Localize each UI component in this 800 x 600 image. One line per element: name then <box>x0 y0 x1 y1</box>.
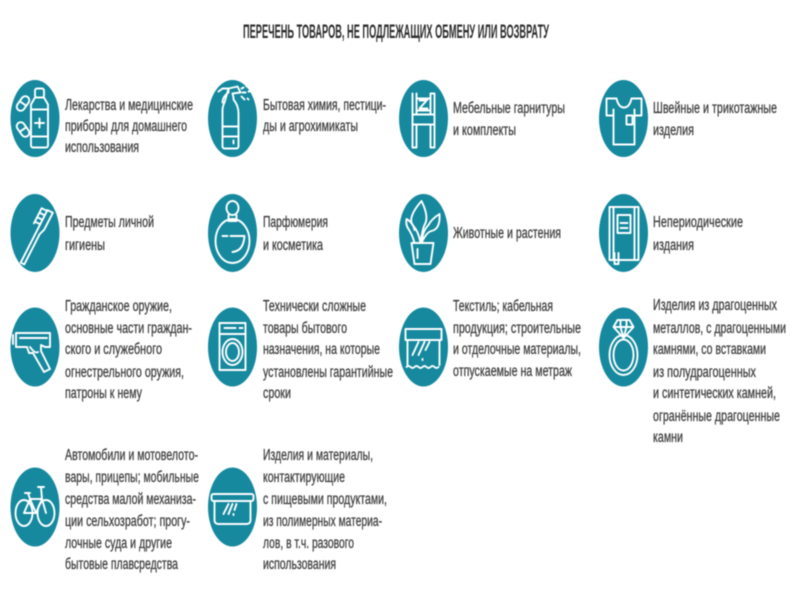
text: textile: и отделочные материалы, <box>453 341 581 358</box>
text: jewellery: из полудрагоценных <box>653 364 756 381</box>
icon: medicine bottle and pills <box>10 80 60 157</box>
text: furniture: Мебельные гарнитуры <box>453 100 565 117</box>
icon: fabric roll <box>399 308 448 386</box>
text: vehicles: вары, прицепы; мобильные <box>65 469 199 486</box>
text: vehicles: лочные суда и другие <box>65 535 172 552</box>
icon: pistol <box>10 308 60 386</box>
item: jewellery <box>599 297 786 446</box>
text: jewellery <box>653 297 786 446</box>
text: textile <box>453 298 581 380</box>
text: complex household goods <box>263 298 393 402</box>
item: non-periodical publications <box>599 194 743 272</box>
text: textile: Текстиль; кабельная <box>453 298 553 315</box>
icon: chair <box>399 80 448 157</box>
text: garments <box>653 100 777 139</box>
text: food contact materials <box>263 447 387 573</box>
text: food contact materials: контактирующие <box>263 469 345 486</box>
text: food contact materials: лов, в т.ч. разового <box>263 535 354 552</box>
text: hygiene <box>65 214 154 254</box>
text: complex household goods: назначения, на которые <box>263 341 380 358</box>
text: household chemicals: Бытовая химия, пестици- <box>263 97 386 114</box>
text: medicines: Лекарства и медицинские <box>65 97 193 114</box>
item: civilian weapons <box>10 298 192 402</box>
text: complex household goods: сроки <box>263 385 291 402</box>
text: furniture: и комплекты <box>453 122 516 139</box>
text: household chemicals <box>263 97 386 135</box>
text: medicines <box>65 97 193 156</box>
text: food contact materials: использования <box>263 556 336 573</box>
text: food contact materials: с пищевыми продуктами, <box>263 491 387 508</box>
text: complex household goods: установлены гарантийные <box>263 364 393 381</box>
text: furniture <box>453 100 565 139</box>
icon: potted plant <box>399 194 448 272</box>
text: food contact materials: Изделия и материалы, <box>263 447 373 464</box>
item: perfume <box>208 194 328 272</box>
icon: spray bottle <box>208 80 257 157</box>
text: complex household goods: товары бытового <box>263 320 347 337</box>
item: vehicles <box>10 447 199 573</box>
text: household chemicals: ды и агрохимикаты <box>263 118 358 135</box>
text: civilian weapons: ского и служебного <box>65 341 162 358</box>
icon: t-shirt <box>599 80 648 157</box>
text: jewellery: камни <box>653 429 683 446</box>
text: perfume: Парфюмерия <box>263 214 328 231</box>
text: complex household goods: Технически сложные <box>263 298 366 315</box>
text: hygiene: Предметы личной <box>65 214 154 231</box>
text: food contact materials: из полимерных материа- <box>263 513 382 530</box>
text: non-periodical publications <box>653 214 743 254</box>
icon: food container <box>208 468 257 546</box>
icon: washing machine <box>208 308 257 386</box>
icon: toothbrush <box>10 194 60 272</box>
text: non-periodical publications: издания <box>653 237 694 254</box>
text: hygiene: гигиены <box>65 237 105 254</box>
text: vehicles: ции сельхозработ; прогу- <box>65 513 190 530</box>
icon: book <box>599 194 648 272</box>
icon: bicycle <box>10 468 60 546</box>
text: perfume: и косметика <box>263 237 323 254</box>
text: garments: изделия <box>653 122 694 139</box>
text: vehicles: Автомобили и мотовелото- <box>65 447 198 464</box>
item: complex household goods <box>208 298 393 402</box>
text: civilian weapons <box>65 298 192 402</box>
text: medicines: приборы для домашнего <box>65 118 187 135</box>
item: garments <box>599 80 777 157</box>
text: civilian weapons: основные части граждан- <box>65 320 192 337</box>
text: vehicles: средства малой механиза- <box>65 491 196 508</box>
text: civilian weapons: огнестрельного оружия, <box>65 364 184 381</box>
icon: perfume bottle <box>208 194 257 272</box>
item: food contact materials <box>208 447 387 573</box>
text: civilian weapons: патроны к нему <box>65 385 142 402</box>
text: medicines: использования <box>65 139 139 156</box>
text: perfume <box>263 214 328 254</box>
text: vehicles: бытовые плавсредства <box>65 556 178 573</box>
item: household chemicals <box>208 80 386 157</box>
item: hygiene <box>10 194 154 272</box>
item: animals and plants <box>399 194 561 272</box>
text: civilian weapons: Гражданское оружие, <box>65 298 172 315</box>
item: textile <box>399 298 581 386</box>
item: furniture <box>399 80 565 157</box>
text: textile: продукция; строительные <box>453 320 581 337</box>
text: textile: отпускаемые на метраж <box>453 363 572 380</box>
icon: diamond ring <box>599 308 648 386</box>
text: vehicles <box>65 447 199 573</box>
text: non-periodical publications: Непериодические <box>653 214 743 231</box>
item: medicines <box>10 80 193 157</box>
text: animals and plants: Животные и растения <box>453 225 561 242</box>
